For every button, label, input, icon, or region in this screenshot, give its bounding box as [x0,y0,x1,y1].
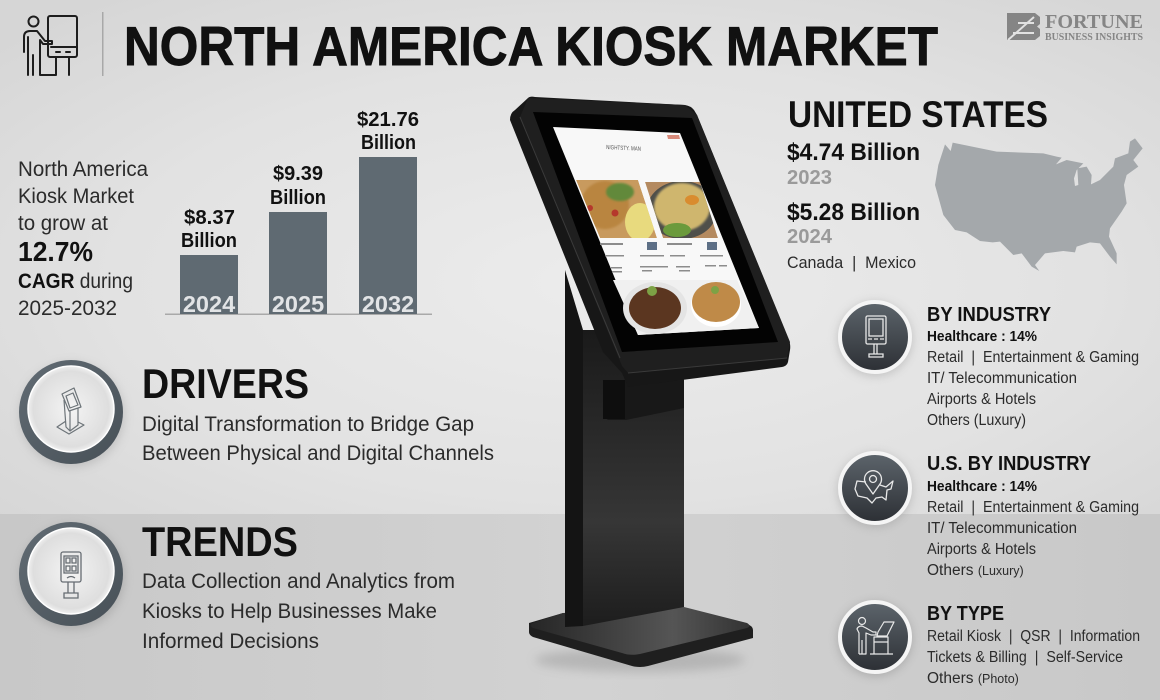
text block: market growth summary [18,158,148,320]
bar: 2024: $8.37 [184,206,235,229]
food photo: right [645,181,718,239]
text block: market growth summary: North America [18,158,148,181]
text block: drivers: Digital Transformation to Bridge Gap [142,413,474,436]
screen lower band [613,280,759,335]
text block: drivers [142,413,494,465]
stats: united states: Canada | Mexico [787,253,916,272]
logo: Fortune Business Insights: FORTUNE [1045,11,1143,33]
text block: by industry: Others (Luxury) [927,412,1026,429]
text block: market growth summary: Kiosk Market [18,185,134,208]
bar: 2024 [180,206,238,317]
kiosk bezel [533,112,778,352]
text block: by type: Retail Kiosk | QSR | Information [927,628,1140,645]
icon: by industry [838,302,912,376]
text block: drivers: Between Physical and Digital Channels [142,442,494,465]
icon: u.s. by industry [838,453,912,527]
map: united states [935,138,1143,271]
stats: united states: 2024 [787,226,833,248]
icon: trends badge [19,522,124,629]
text block: u.s. by industry: Others (Luxury) [927,562,1024,579]
food bowl: right [691,282,741,327]
text block: by type [927,603,1140,687]
kiosk illustration [510,97,790,672]
text block: by type: BY TYPE [927,603,1004,625]
text block: by industry: Healthcare : 14% [927,329,1037,345]
logo: Fortune Business Insights: BUSINESS INSIGHTS [1045,32,1143,43]
bar: 2032: Billion [361,131,416,154]
text block: market growth summary: 12.7% [18,236,93,267]
bar: 2024: 2024 [183,291,235,317]
text block: market growth summary: to grow at [18,212,108,235]
heading: drivers: DRIVERS [142,360,309,407]
text block: by type: Others (Photo) [927,670,1019,687]
bar: 2025: 2025 [272,291,324,317]
text block: by type: Tickets & Billing | Self-Service [927,649,1123,666]
text block: u.s. by industry: U.S. BY INDUSTRY [927,453,1092,475]
text block: u.s. by industry: Retail | Entertainment & Gaming [927,499,1139,516]
text block: u.s. by industry: IT/ Telecommunication [927,520,1077,537]
kiosk base [529,607,753,672]
text block: u.s. by industry [927,453,1139,579]
logo: Fortune Business Insights [1007,11,1143,43]
icon: drivers badge [19,360,124,467]
text block: trends: Informed Decisions [142,630,319,653]
header divider [102,12,104,76]
stats: united states [787,139,920,272]
text block: trends: Data Collection and Analytics from [142,570,455,593]
bar: 2025 [269,162,327,317]
kiosk screen [553,127,759,335]
heading: trends: TRENDS [142,518,298,565]
text block: trends [142,570,455,653]
text block: by industry: Retail | Entertainment & Gaming [927,349,1139,366]
bar: 2032 [357,108,419,317]
text block: by industry [927,304,1139,429]
stats: united states: $4.74 Billion [787,139,920,166]
text block: u.s. by industry: Airports & Hotels [927,541,1036,558]
text block: market growth summary: CAGR during [18,270,133,293]
bar: 2024: Billion [181,229,237,252]
food photo: left [576,180,657,241]
title: NORTH AMERICA KIOSK MARKET [124,15,938,77]
bar chart: market size [165,108,432,317]
screen menu text [600,242,727,272]
bar: 2025: Billion [270,186,326,209]
kiosk screen: NIGHTSTY. MAN [606,145,641,153]
text block: u.s. by industry: Healthcare : 14% [927,479,1037,495]
food bowl: left [623,282,687,334]
bar: 2032: 2032 [362,291,414,317]
kiosk post [565,270,684,627]
stats: united states: 2023 [787,167,832,189]
text block: by industry: IT/ Telecommunication [927,370,1077,387]
text block: trends: Kiosks to Help Businesses Make [142,600,437,623]
icon: by type [838,602,912,676]
heading: united states: UNITED STATES [788,94,1048,135]
text block: by industry: Airports & Hotels [927,391,1036,408]
stats: united states: $5.28 Billion [787,199,920,226]
bar: 2032: $21.76 [357,108,419,131]
icon: presenter at kiosk board [24,16,77,75]
text block: by industry: BY INDUSTRY [927,304,1052,326]
text block: market growth summary: 2025-2032 [18,297,117,320]
kiosk frame [510,97,790,387]
bar: 2025: $9.39 [273,162,323,185]
